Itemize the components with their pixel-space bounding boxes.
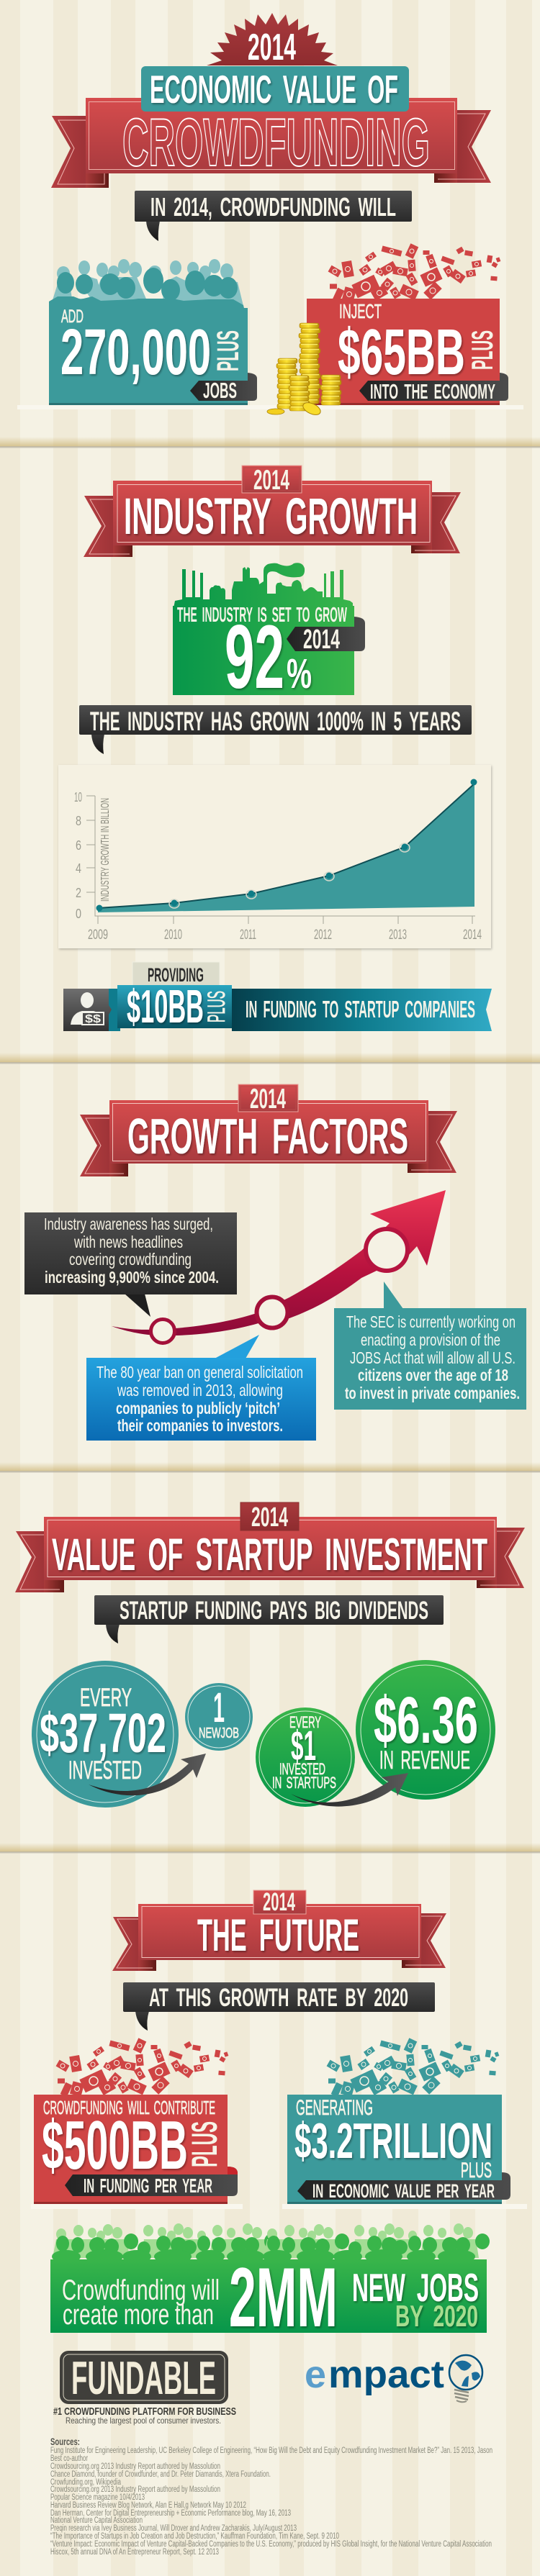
- ribbon banner: [80, 1100, 457, 1176]
- crowd silhouette right: [263, 2223, 490, 2264]
- circle: every $6.36: [356, 1660, 495, 1800]
- shelf: [17, 405, 523, 409]
- axis title: INDUSTRY GROWTH IN BILLION: [99, 798, 112, 902]
- y labels: 4: [76, 861, 81, 876]
- right ribbon tail: [434, 110, 491, 183]
- x labels: 2013: [389, 928, 407, 943]
- callout: SEC: [334, 1282, 526, 1410]
- jobs ribbon: JOBS: [203, 378, 237, 403]
- x labels: [88, 928, 482, 943]
- teal jobs panel: [49, 259, 257, 405]
- investor icon: $$: [85, 1013, 101, 1025]
- y labels: 8: [76, 814, 81, 828]
- ribbon banner: [112, 1904, 446, 1971]
- green jobs panel: [50, 2223, 490, 2344]
- left ribbon tail: [51, 116, 109, 188]
- providing tab: PROVIDING: [148, 964, 204, 986]
- invested: INVESTED: [279, 1760, 325, 1778]
- sources: Harvard Business Review Blog Network, Alan E Hall,g Network May 10 2012: [50, 2501, 246, 2510]
- 2014 tab: [238, 1084, 298, 1115]
- logo: fundable: [60, 2351, 228, 2404]
- flying money teal: [327, 2038, 499, 2097]
- every: EVERY: [289, 1713, 321, 1731]
- 2014 ribbon: 2014: [303, 625, 340, 655]
- $10BB plate: [117, 985, 232, 1028]
- callout: awareness: with news headlines: [73, 1233, 183, 1251]
- sources: Best co-author: [50, 2454, 88, 2463]
- logo: empact: mpact: [328, 2353, 444, 2396]
- data points: [96, 779, 477, 911]
- arrow: [89, 1754, 206, 1795]
- starburst badge: [207, 13, 338, 65]
- sources: National Venture Capital Association: [50, 2516, 143, 2525]
- callout: solicitation ban: their companies to investors.: [117, 1416, 283, 1435]
- callout: awareness: [24, 1212, 237, 1317]
- callout: solicitation ban: [86, 1335, 316, 1441]
- teal title plate: [141, 66, 409, 112]
- by 2020: BY 2020: [395, 2299, 478, 2333]
- callout: awareness: increasing 9,900% since 2004.: [45, 1268, 219, 1287]
- add: ADD: [61, 307, 84, 327]
- factory skyline: [173, 563, 353, 612]
- invested: INVESTED: [68, 1756, 142, 1784]
- milestone 2: [256, 1297, 288, 1328]
- y labels: 0: [76, 907, 81, 921]
- sources: Crowfunding.org, Wikipedia: [50, 2478, 121, 2487]
- amount: $6.36: [374, 1684, 478, 1757]
- callout: awareness: covering crowdfunding: [69, 1250, 192, 1269]
- speech bubble: [94, 1595, 444, 1643]
- teal value panel: [287, 2095, 510, 2204]
- red economy panel: PLUS: [465, 330, 499, 370]
- ribbon banner: [15, 1517, 525, 1592]
- plus: PLUS: [461, 2159, 492, 2182]
- sources: Chance Diamond, founder of Crowdfunder, and Dr. Peter Diamandis, Xtera Foundation.: [50, 2470, 271, 2479]
- crowd silhouette: [49, 259, 248, 324]
- section: hero header: [17, 13, 523, 417]
- one dollar: $1: [291, 1723, 316, 1769]
- coin stacks: [267, 323, 341, 417]
- line: CROWDFUNDING WILL CONTRIBUTE: [43, 2097, 215, 2118]
- speech bubble: [135, 191, 412, 241]
- section: the future: [31, 1888, 527, 2557]
- year 2014: 2014: [248, 27, 296, 68]
- circle: 1 new job: [185, 1683, 253, 1751]
- red funding panel: [34, 2095, 238, 2204]
- text: create more than: create more than: [63, 2299, 214, 2331]
- $500BB: $500BB: [42, 2107, 188, 2184]
- green growth panel: THE INDUSTRY IS SET TO GROW: [177, 604, 347, 627]
- economy ribbon: [359, 373, 508, 404]
- axes: [86, 796, 475, 924]
- area series: [98, 784, 474, 912]
- sources: Popular Science magazine 10/4/2013: [50, 2493, 145, 2502]
- milestone 1: [151, 1320, 174, 1343]
- x labels: 2012: [314, 928, 332, 943]
- area chart card: [58, 765, 491, 948]
- 2014 tab: 2014: [253, 465, 289, 496]
- arrow: [291, 1773, 408, 1807]
- investor icon: [63, 989, 112, 1031]
- 2014 tab: [240, 1502, 299, 1533]
- 2014 tab: 2014: [250, 1084, 286, 1115]
- logo: empact: [305, 2353, 482, 2402]
- shelves: [31, 2204, 527, 2209]
- ribbon banner: [84, 481, 461, 557]
- band: [232, 989, 492, 1031]
- $10BB: $10BB: [127, 980, 204, 1033]
- in startups: IN STARTUPS: [272, 1774, 336, 1792]
- x labels: 2011: [240, 928, 256, 943]
- section: industry growth: [58, 465, 492, 1033]
- 2014 tab: 2014: [251, 1502, 288, 1533]
- fundable tagline: #1 CROWDFUNDING PLATFORM FOR BUSINESS: [53, 2405, 236, 2418]
- speech bubble: [79, 705, 472, 754]
- y labels: 6: [76, 838, 81, 853]
- circle: every $37,702: [32, 1661, 179, 1808]
- logo: empact: e: [305, 2353, 326, 2396]
- red funding panel: PLUS: [184, 2121, 225, 2167]
- 270,000: 270,000: [60, 317, 211, 389]
- speech bubble: [123, 1982, 435, 2031]
- heading: THE FUTURE: [197, 1910, 359, 1961]
- crowd silhouette: [52, 2223, 279, 2264]
- ribbon: [297, 2172, 510, 2202]
- in revenue: IN REVENUE: [379, 1746, 470, 1774]
- sources: Preqin research via Ivey Business Journal, Will Drover and Andrew Zacharakis, July/August 2013: [50, 2524, 297, 2533]
- sources: Crowdsourcing.org 2013 Industry Report authored by Massolution: [50, 2462, 220, 2471]
- ribbon: [65, 2167, 238, 2197]
- percent: %: [287, 650, 312, 697]
- ribbon: IN FUNDING PER YEAR: [84, 2174, 212, 2197]
- logo: fundable: FUNDABLE: [71, 2351, 216, 2404]
- red economy panel: [307, 299, 508, 405]
- flying money red: [328, 243, 500, 302]
- jobs ribbon: [190, 373, 257, 403]
- sources: [50, 2436, 492, 2557]
- teal jobs panel: PLUS: [211, 330, 246, 371]
- flying money red: [56, 2038, 228, 2097]
- providing banner: [63, 962, 492, 1033]
- main ribbon: [86, 98, 457, 173]
- circle: every $1: [256, 1707, 355, 1807]
- section: growth factors: [24, 1084, 526, 1441]
- sources: Hiscox, 5th annual DNA of An Entrepreneur Report, Sept. 12 2013: [50, 2548, 219, 2557]
- generating: GENERATING: [296, 2096, 373, 2120]
- y labels: 10: [74, 790, 82, 804]
- every: EVERY: [80, 1684, 132, 1712]
- x labels: 2014: [463, 928, 482, 943]
- providing banner: PLUS: [203, 991, 230, 1022]
- callout: solicitation ban: The 80 year ban on general solicitation: [96, 1363, 303, 1382]
- fundable subline: Reaching the largest pool of consumer investors.: [66, 2416, 221, 2426]
- 92: 92: [225, 607, 284, 707]
- y labels: [74, 790, 82, 921]
- 2014 ribbon: [287, 617, 365, 655]
- circle: 1 new job: 1: [213, 1684, 225, 1731]
- inject: INJECT: [339, 300, 382, 322]
- sources: “The Importance of Startups in Job Creation and Job Destruction,” Kauffman Foundation, Tim Kane, Sept. 9 2010: [50, 2532, 339, 2541]
- x labels: 2010: [164, 928, 182, 943]
- sources: Sources:: [50, 2436, 80, 2447]
- section: value of startup investment: [15, 1502, 525, 1808]
- new job: NEWJOB: [199, 1725, 239, 1741]
- text: crowdfunding will: Crowdfunding will: [62, 2275, 220, 2306]
- milestone 3: [366, 1229, 408, 1271]
- callout: awareness: Industry awareness has surged,: [44, 1215, 213, 1233]
- sources: Crowdsourcing.org 2013 Industry Report authored by Massolution: [50, 2485, 220, 2494]
- green growth panel: [173, 604, 365, 707]
- y labels: 2: [76, 886, 81, 900]
- callout: solicitation ban: companies to publicly ‘pitch’: [116, 1399, 280, 1418]
- 2MM: 2MM: [229, 2250, 338, 2344]
- $65BB: $65BB: [338, 317, 465, 389]
- amount: $37,702: [40, 1702, 166, 1764]
- growth arrow: [112, 1190, 446, 1343]
- providing tab: [132, 962, 220, 988]
- 2014 tab: [253, 1888, 306, 1916]
- 2014 tab: [242, 465, 302, 496]
- sources: Dan Herman, Center for Digital Entrepreneurship + Economic Performance blog, May 16, 2013: [50, 2509, 291, 2518]
- 2014 tab: 2014: [263, 1888, 295, 1916]
- callout: solicitation ban: was removed in 2013, allowing: [117, 1381, 283, 1400]
- x labels: 2009: [88, 928, 108, 943]
